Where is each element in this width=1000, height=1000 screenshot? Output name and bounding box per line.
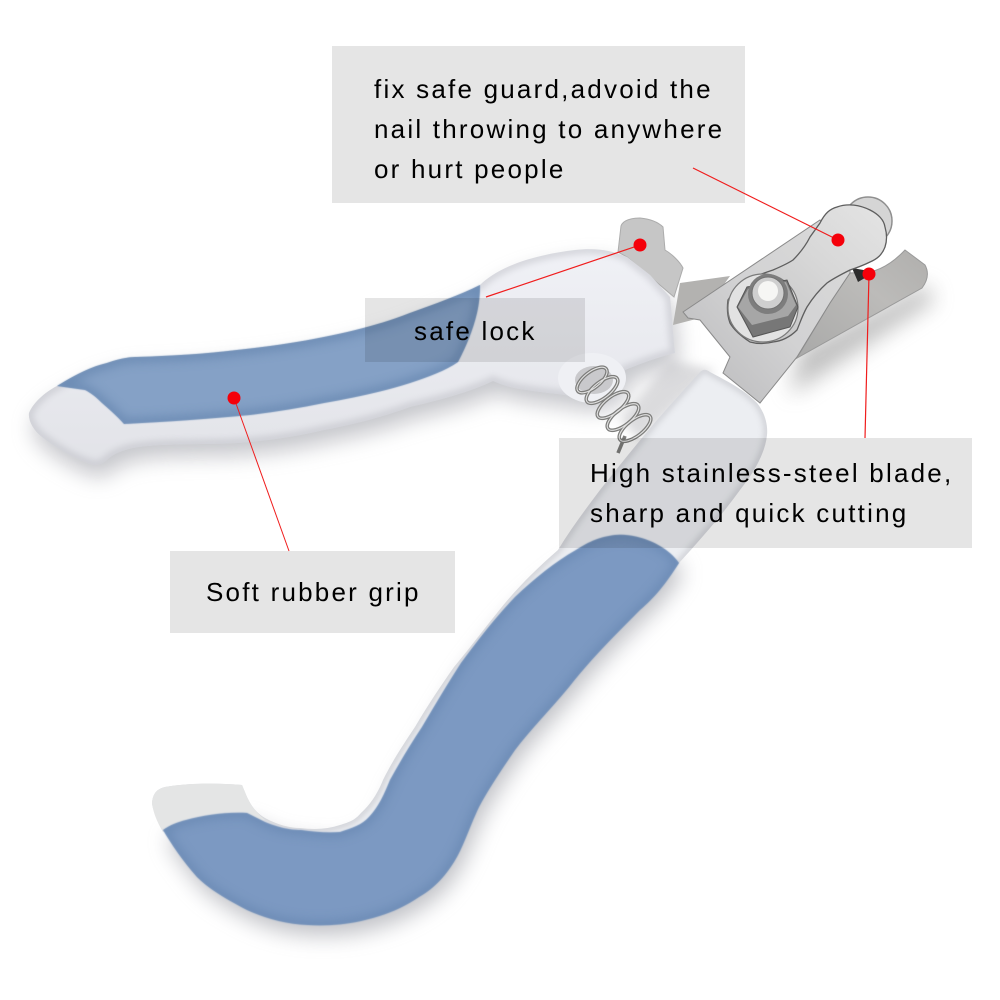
- tip shade: [152, 784, 265, 832]
- callout text: rubber grip: Soft rubber grip: [206, 577, 421, 607]
- rear rim: [844, 197, 892, 245]
- callout text: safe guard: or hurt people: [374, 154, 566, 184]
- spring boss: [558, 353, 626, 403]
- callout text: stainless blade: [590, 458, 953, 528]
- callout panel: rubber grip: [170, 551, 455, 633]
- plate body: [683, 220, 850, 403]
- callout text: safe guard: [374, 74, 724, 184]
- callout text: safe guard: fix safe guard,advoid the: [374, 74, 713, 104]
- white body: [152, 370, 767, 880]
- blue rubber grip: [57, 285, 480, 424]
- steel plate: [683, 197, 892, 403]
- safe guard plate: [727, 205, 886, 344]
- callout text: stainless blade: High stainless-steel blade,: [590, 458, 953, 488]
- leader line: rubber grip: [228, 392, 289, 551]
- safe lock lever: [618, 218, 683, 297]
- washer: [728, 274, 798, 342]
- leader line: safe lock: [486, 238, 646, 297]
- white body: [29, 249, 675, 465]
- leader line: blade: [862, 268, 876, 438]
- callout panel: safe guard: [332, 46, 745, 203]
- soft drop shadows: [33, 261, 935, 935]
- callout text: safe guard: nail throwing to anywhere: [374, 114, 724, 144]
- callout panel: safe lock: [365, 298, 585, 362]
- callout panel: stainless blade: [559, 438, 972, 548]
- blue rubber grip: [163, 535, 679, 925]
- upper handle: [29, 249, 675, 465]
- leader line: safe guard: [693, 168, 844, 246]
- hex nut: [737, 280, 798, 337]
- spring: [573, 363, 655, 453]
- callout text: stainless blade: sharp and quick cutting: [590, 498, 908, 528]
- callout text: safe lock: safe lock: [414, 316, 537, 346]
- lower handle: [152, 370, 767, 925]
- product: nail clipper: [29, 197, 935, 935]
- back blade: [673, 250, 927, 358]
